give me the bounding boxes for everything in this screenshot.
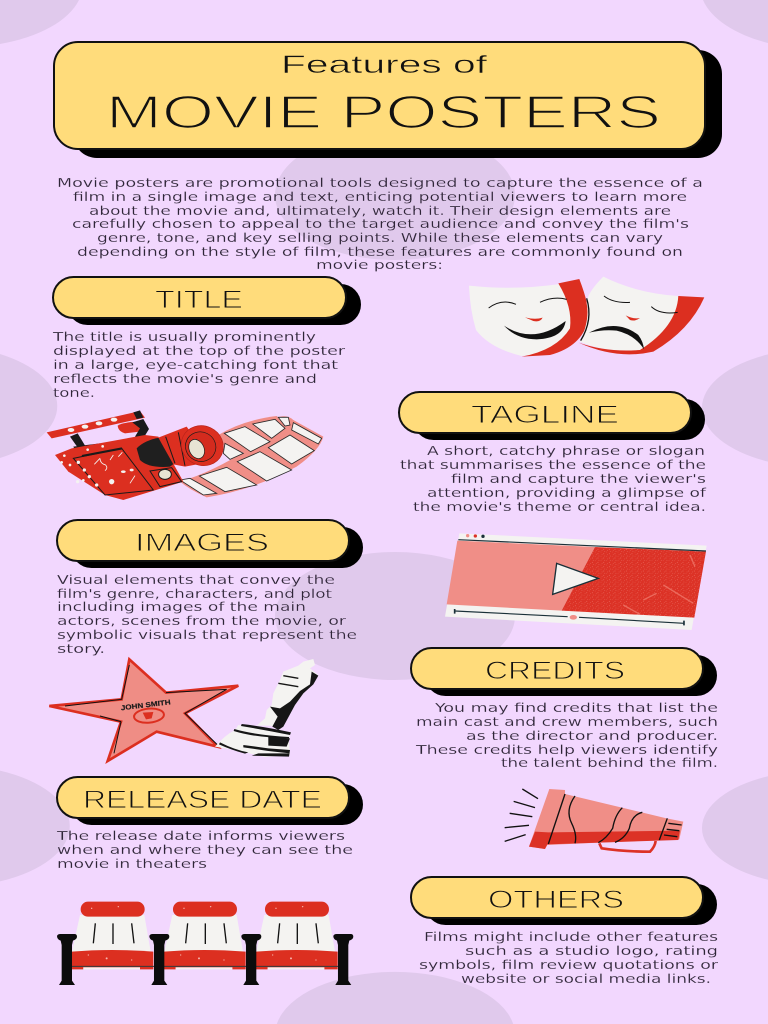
intro paragraph: genre, tone, and key selling points. While these elements can vary xyxy=(97,230,664,245)
text: others description: symbols, film review quotations or xyxy=(419,957,719,972)
text: images description: symbolic visuals that represent the xyxy=(57,627,357,642)
text: tagline description: that summarises the essence of the xyxy=(400,457,706,472)
icon: video camera xyxy=(47,410,230,500)
text: title description: tone. xyxy=(53,385,95,400)
icon: film reel xyxy=(180,416,323,497)
icon: megaphone xyxy=(505,789,683,852)
text: release date description: when and where they can see the xyxy=(57,842,353,857)
heading: credits: CREDITS xyxy=(485,657,625,685)
heading: others: OTHERS xyxy=(488,886,624,914)
panel: credits xyxy=(411,648,719,770)
camera body xyxy=(55,435,183,500)
text: images description: film's genre, characters, and plot xyxy=(57,586,332,601)
text: images description: actors, scenes from the movie, or xyxy=(57,613,347,628)
heading: images: IMAGES xyxy=(135,529,269,557)
panel: tagline xyxy=(399,392,707,514)
text: tagline description: A short, catchy phrase or slogan xyxy=(427,443,705,458)
text: credits description: main cast and crew members, such xyxy=(416,714,718,729)
panel: release date xyxy=(56,777,363,871)
text: images description xyxy=(57,572,357,656)
heading: movie posters: MOVIE POSTERS xyxy=(106,86,661,138)
text: credits description: the talent behind the film. xyxy=(501,755,718,770)
heading: release date: RELEASE DATE xyxy=(83,786,322,814)
text: others description: website or social media links. xyxy=(461,971,711,986)
text: title description: displayed at the top of the poster xyxy=(53,343,346,358)
camera rig xyxy=(47,410,149,450)
text: images description: story. xyxy=(57,641,105,656)
icon: theatre masks xyxy=(469,277,704,357)
text: title description: reflects the movie's genre and xyxy=(53,371,317,386)
text: credits description: You may find credits that list the xyxy=(434,700,718,715)
text: tagline description: attention, providing a glimpse of xyxy=(427,485,707,500)
text: release date description: The release date informs viewers xyxy=(56,828,345,843)
text: release date description: movie in theaters xyxy=(57,856,207,871)
text: others description: such as a studio logo, rating xyxy=(465,943,718,958)
intro paragraph: film in a single image and text, enticing potential viewers to learn more xyxy=(73,189,687,204)
icon: walk of fame star xyxy=(49,659,238,761)
text: title description xyxy=(52,329,346,400)
panel: others xyxy=(411,877,719,986)
text: others description: Films might include other features xyxy=(424,929,718,944)
heading: title: TITLE xyxy=(155,286,243,314)
text: release date description xyxy=(56,828,353,871)
text: tagline description: the movie's theme or central idea. xyxy=(413,499,706,514)
intro paragraph: depending on the style of film, these features are commonly found on xyxy=(77,244,683,259)
intro paragraph: movie posters: xyxy=(316,257,443,272)
text: images description: Visual elements that convey the xyxy=(57,572,335,587)
text: title description: in a large, eye-catching font that xyxy=(53,357,338,372)
text: credits description: These credits help viewers identify xyxy=(415,742,719,757)
intro paragraph: Movie posters are promotional tools designed to capture the essence of a xyxy=(57,175,703,190)
text: title description: The title is usually prominently xyxy=(52,329,317,344)
panel: title xyxy=(52,277,361,400)
camera lens xyxy=(158,419,230,472)
text: tagline description xyxy=(400,443,707,514)
title banner xyxy=(54,42,722,158)
text: credits description xyxy=(415,700,719,770)
text: images description: including images of the main xyxy=(57,599,306,614)
intro paragraph xyxy=(57,175,703,272)
text: credits description: as the director and producer. xyxy=(466,728,718,743)
text: tagline description: film and capture the viewer's xyxy=(451,471,706,486)
intro paragraph: about the movie and, ultimately, watch it. Their design elements are xyxy=(89,203,671,218)
panel: images xyxy=(57,520,363,656)
icon: award statuette xyxy=(215,659,318,757)
icon: walk of fame star: JOHN SMITH xyxy=(121,699,171,712)
intro paragraph: carefully chosen to appeal to the target audience and convey the film's xyxy=(72,216,689,231)
heading: tagline: TAGLINE xyxy=(471,401,619,429)
icon: video player xyxy=(445,533,707,630)
heading: features of: Features of xyxy=(281,51,487,79)
text: others description xyxy=(419,929,719,986)
icon: cinema seats xyxy=(57,902,353,985)
